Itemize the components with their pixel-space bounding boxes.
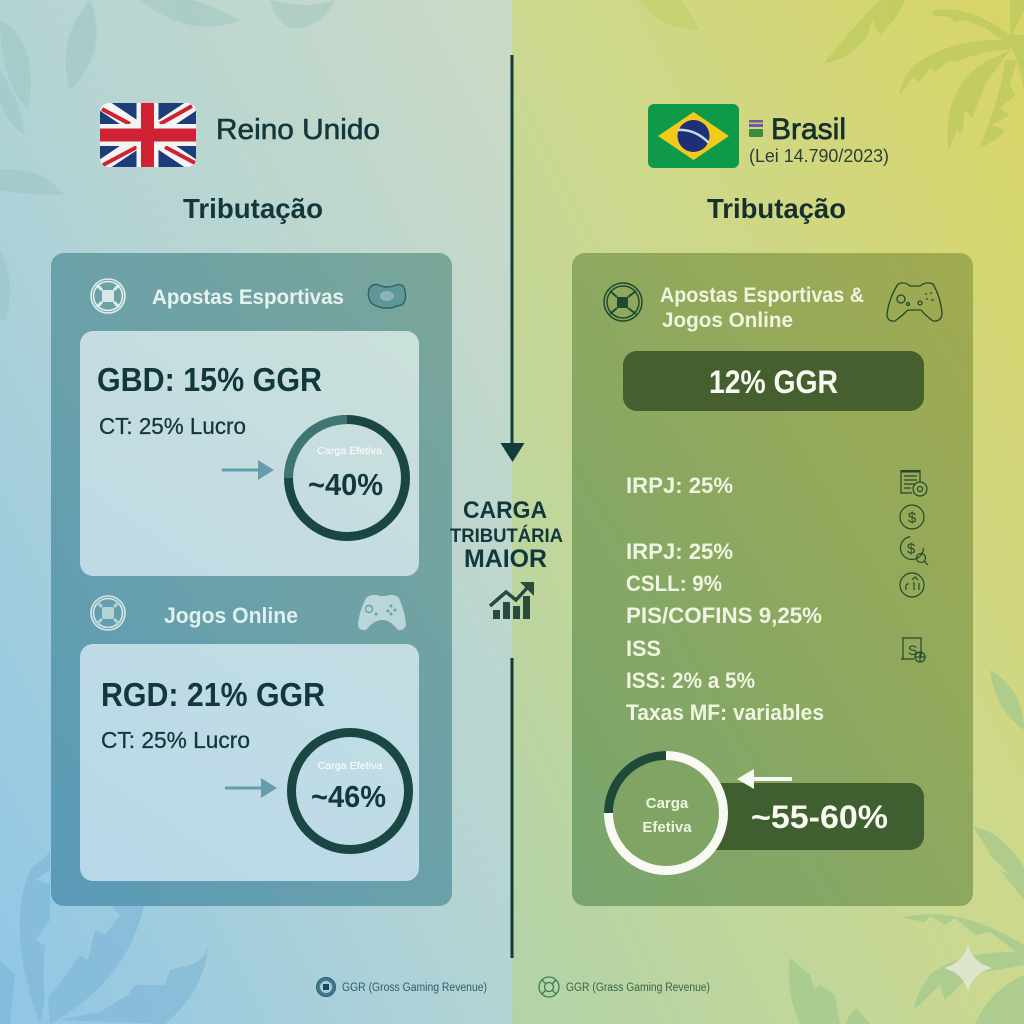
tax list: ISS: 2% a 5% [626,668,755,693]
icon: football [604,283,642,321]
GBD rate: GBD: 15% GGR [97,361,322,398]
panel: Brasil [572,253,973,906]
footnote text: GGR (Grass Gaming Revenue) [566,982,710,994]
gauge: carga efetiva 46% [292,732,408,850]
heading: Jogos Online: Jogos Online [164,603,298,628]
rate pill: 12% GGR [623,351,924,411]
icon: gamepad outline [887,283,942,321]
footnote text: GGR (Gross Gaming Revenue) [342,982,487,994]
heading: Tributação, Brasil: Tributação [707,193,846,224]
country header: Reino Unido [100,103,380,167]
icons: tax list: $ [908,510,917,526]
tax list [626,473,824,725]
card: GBD [80,331,419,576]
heading: Tributação, Reino Unido: Tributação [183,193,323,224]
heading: Apostas Esportivas & Jogos Online: Jogos Online [662,309,793,332]
country name: Reino Unido [216,114,380,146]
rate pill: 12% GGR: 12% GGR [709,364,838,400]
tax list: ISS [626,636,661,661]
effective rate pill [690,783,924,850]
heading: Apostas Esportivas & Jogos Online: Apostas Esportivas & [660,284,864,307]
background: right half [512,0,1024,1024]
central callout: carga tributária maior: TRIBUTÁRIA [450,525,563,547]
country name: Brasil [771,113,846,146]
gauge: carga efetiva 40% [288,420,406,536]
heading: Apostas Esportivas: Apostas Esportivas [152,286,344,309]
gauge label: Efetiva [642,819,692,836]
background palm leaves: left side [0,0,335,320]
divider arrow: top [500,55,524,462]
effective rate pill: ~55-60% [751,799,888,835]
central callout: carga tributária maior [450,497,563,573]
central callout: carga tributária maior: CARGA [463,497,547,524]
gauge label: Carga [646,795,689,812]
law reference: (Lei 14.790/2023) [749,146,889,166]
icon: gamepad, jogos [358,595,406,630]
CT rate: CT: 25% Lucro [101,727,250,753]
icons: tax list [900,470,928,662]
icon: rising chart [490,582,534,619]
sparkle [944,944,992,992]
icon: small flag emblem [749,120,763,137]
gauge value: ~40% [308,467,383,502]
icon: football, jogos [91,596,125,630]
background: left half [0,0,512,1024]
tax list: Taxas MF: variables [626,700,824,725]
background palm tree: lower left [0,850,208,1024]
heading: Apostas Esportivas & Jogos Online [660,284,864,332]
icons: tax list: $ [907,540,916,558]
arrow [222,460,274,480]
icon: UK flag [100,103,196,167]
icons: tax list: S [908,642,917,658]
footer note: left [316,978,487,996]
gauge: carga efetiva Brasil [608,756,724,870]
icon: football [316,978,336,996]
gauge label [642,795,692,836]
gauge label: Carga Efetiva [318,761,383,772]
panel: Reino Unido [51,253,452,906]
arrow: white [737,769,792,789]
background palm tree: lower right [789,670,1024,1024]
tax list: CSLL: 9% [626,571,722,596]
CT rate: CT: 25% Lucro [99,413,246,439]
tax list: IRPJ: 25% [626,539,733,564]
gauge value: ~46% [311,779,386,814]
gauge label: Carga Efetiva [317,446,382,457]
background palm tree: upper right [640,0,1024,150]
icon: Brazil flag [648,104,739,168]
arrow [225,778,277,798]
card: RGD [80,644,419,881]
divider line: bottom [510,658,514,958]
tax list: PIS/COFINS 9,25% [626,603,822,628]
country header: Brasil [648,104,889,168]
tax list: IRPJ: 25% [626,473,733,498]
icon: football outline [539,977,559,997]
central callout: carga tributária maior: MAIOR [464,545,547,573]
RGD rate: RGD: 21% GGR [101,676,325,713]
icon: football, apostas [91,279,125,313]
footer note: right [539,977,710,997]
icon: gamepad, apostas [368,284,406,308]
